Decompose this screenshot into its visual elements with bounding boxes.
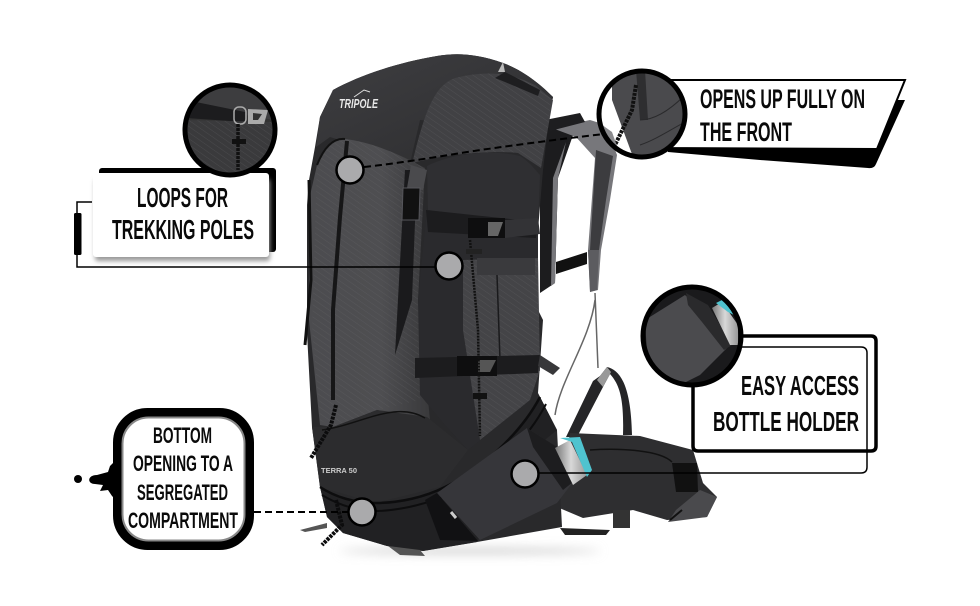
- callout: easy access bottle holder: [538, 287, 876, 473]
- text: bottom opening: [128, 423, 238, 533]
- text: bottom opening: SEGREGATED: [137, 480, 228, 505]
- inset: front zipper: [598, 70, 690, 165]
- inset: bottle pocket: [643, 287, 741, 385]
- front left panel: [309, 139, 430, 427]
- text: easy access bottle holder: BOTTLE HOLDER: [713, 406, 859, 437]
- vertical compression strap: [395, 170, 417, 355]
- brand logo: [339, 90, 378, 111]
- zippers: [333, 141, 347, 400]
- hip belt: [557, 433, 717, 520]
- connector: dashed front line: [364, 134, 604, 167]
- main body: [307, 54, 562, 551]
- callout: bottom opening to a segregated compartment: [74, 412, 349, 546]
- text: loops for trekking poles: [112, 182, 254, 245]
- central pockets: [427, 153, 540, 225]
- bottle pocket: [437, 428, 573, 540]
- text: bottom opening: BOTTOM: [153, 423, 212, 448]
- text: easy access bottle holder: [713, 370, 859, 437]
- top lid: [316, 54, 553, 163]
- inset: pole loop: [185, 85, 275, 175]
- hotspot markers: [336, 156, 538, 526]
- shoulder strap: [552, 120, 617, 292]
- text: opens up fully on the front: OPENS UP FULLY ON: [700, 84, 865, 114]
- model label: TERRA 50: [321, 468, 357, 475]
- bottle: [555, 440, 587, 485]
- horizontal straps and buckles: [426, 210, 538, 238]
- text: bottom opening: OPENING TO A: [133, 451, 233, 476]
- text: loops for trekking poles: LOOPS FOR: [137, 182, 228, 213]
- callout: loops for trekking poles: [74, 85, 436, 267]
- callout: opens up fully on the front: [364, 70, 905, 168]
- text: bottom opening: COMPARTMENT: [128, 508, 238, 533]
- text: loops for trekking poles: TREKKING POLES: [112, 214, 254, 245]
- text: opens up fully on the front: THE FRONT: [700, 117, 792, 147]
- text: easy access bottle holder: EASY ACCESS: [741, 370, 859, 401]
- backpack illustration: [300, 54, 717, 556]
- brand logo: TRIPOLE: [339, 96, 378, 111]
- back pad: [540, 122, 578, 293]
- lower front panel: [312, 410, 468, 503]
- connector: solid line to bag: [77, 202, 436, 267]
- accent bar: [74, 213, 82, 255]
- text: opens up fully on the front: [700, 84, 865, 147]
- splash accent: [74, 460, 116, 500]
- bottom compartment: [320, 397, 557, 551]
- connector: dashed bottom line: [254, 511, 349, 513]
- load lifter strap: [566, 367, 632, 437]
